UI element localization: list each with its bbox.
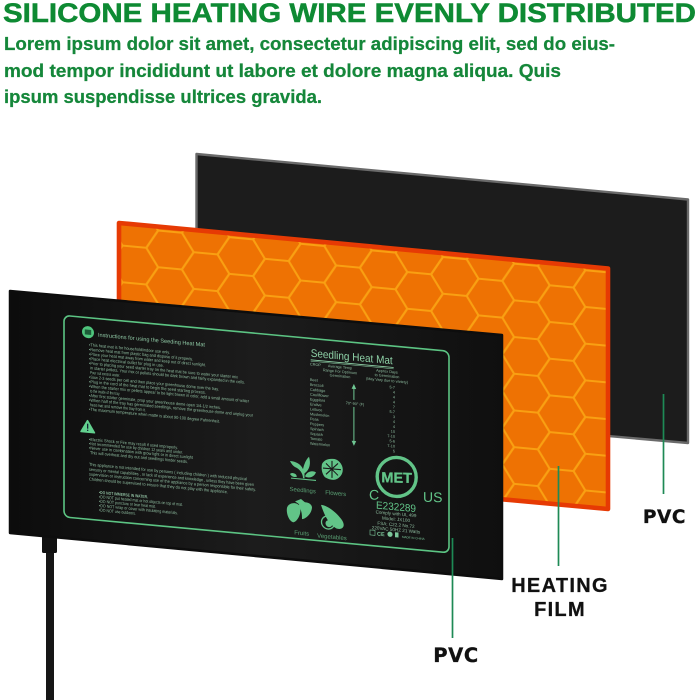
rating details: FSA: C22.2 No.72 (377, 521, 415, 529)
crop names: Beet (310, 378, 319, 383)
do not list: •DO NOT put heated mat or hot objects on top of mat. (99, 494, 183, 507)
instructions list: to the inside of the tray. (90, 388, 120, 396)
crop names: Peppers (310, 422, 324, 427)
instructions list: •Sow 2-3 seeds per cell and then place your greenhouse dome over the tray. (89, 374, 219, 392)
intro paragraph (4, 33, 615, 107)
MET certification mark: C (369, 486, 379, 503)
table header: Germination (330, 373, 350, 379)
instructions list: •Remove heat mat from plastic bag and dispose of it properly. (89, 347, 193, 362)
compliance marks (370, 530, 425, 542)
germination days: 4 (393, 395, 395, 400)
instructions list: in starter pellets. Your mix or pellets should be dark brown and fairly expanded in the cells. (90, 365, 245, 385)
MET certification mark: MET (381, 470, 412, 487)
instructions list: •The maximum temperature when matte is about 90-100 degree Fahrenheit. (89, 407, 220, 424)
crop names: Tomato (310, 437, 322, 442)
table header: to Germination (375, 373, 399, 379)
safety paragraph: Children should be supervised to ensure that they do not play with the appliance. (89, 476, 228, 494)
germination days: 5 (393, 449, 395, 454)
germination days: 4 (393, 400, 395, 405)
safety paragraph: supervision or instruction concerning use of the appliance by a person responsible for their safety. (89, 471, 256, 492)
rating details (372, 509, 421, 535)
germination days: 4 (393, 391, 395, 395)
power cable (42, 536, 57, 700)
rating details: Comply with UL 499 (376, 509, 417, 518)
icon: flowers (322, 458, 343, 481)
crop names: Squash (310, 432, 323, 437)
intro paragraph: mod tempor incididunt ut labore et dolore magna aliqua. Quis (4, 60, 561, 81)
intro paragraph: ipsum suspendisse ultrices gravida. (4, 86, 322, 107)
warnings list: •Not recommended for use by children 12 years and under. (89, 441, 183, 455)
instructions list (89, 342, 254, 427)
green printed border (64, 315, 449, 553)
do not list: •DO NOT wrap or cover with insulating materials. (99, 503, 178, 515)
crop names: Muskmelon (310, 412, 329, 418)
label: back PVC: PVC (643, 507, 686, 528)
crop names: Cabbage (310, 388, 325, 393)
warnings list: •Never use in combination with grow light or in direct sunlight (89, 445, 194, 460)
crop names: Peas (310, 417, 319, 422)
arrow: front PVC leader (452, 538, 454, 638)
table header: Range For Optimum (323, 368, 357, 375)
warnings list (89, 437, 194, 465)
label: heating film (511, 575, 609, 621)
seedlings label: Seedlings (290, 487, 316, 495)
do not list: •DO NOT IMMERSE IN WATER. (99, 490, 148, 499)
table header: CROP (310, 362, 321, 367)
germination days: 5-7 (390, 385, 395, 390)
table header: Average Temp (328, 364, 352, 370)
safety paragraph: sensory or mental capabilities , or lack of experience and knowledge , unless they have been given (89, 467, 255, 487)
instructions list: heat mat and remove the tray from it. (90, 402, 146, 412)
MET certification mark (369, 457, 442, 505)
front PVC mat (10, 291, 502, 579)
germination days: 10 (391, 430, 395, 434)
do not list (99, 490, 183, 520)
icon: fruits (287, 498, 312, 524)
table header: (May Vary due to variety) (366, 377, 409, 385)
fruits label: Fruits (294, 530, 309, 538)
crop names: Lettuce (310, 407, 322, 412)
instructions list: •Prior to placing your seed starter tray on the heat mat be sure to water your starter mix (89, 361, 239, 380)
label: heating film: FILM (534, 599, 586, 621)
certification number: E232289 (376, 499, 416, 515)
instructions list: •This heat mat is for household/indoor use only. (89, 342, 170, 355)
instructions list: •When the starter mix or pellets appear to be light brown in color, add a small amount of water (89, 384, 250, 404)
safety paragraph: This appliance is not intended for use by persons ( including children ) with reduced physical (89, 462, 247, 481)
germination days: 5-7 (390, 410, 395, 414)
instructions heading: Instructions for using the Seeding Heat Mat (98, 333, 205, 349)
do not list: •DO NOT use outdoors. (99, 507, 136, 516)
instructions list: •Plug in the cord of the heat mat to begin the seed starting process. (89, 379, 206, 395)
warnings list: This will overheat and dry out and seedlings hinder seeds. (90, 450, 188, 464)
table header: Approx Days (376, 369, 398, 375)
vegetables label: Vegetables (317, 534, 347, 542)
crop names: Spinach (310, 427, 324, 432)
rating details: Model: JX100 (382, 516, 410, 523)
germination days: 5-6 (390, 439, 395, 444)
label: front PVC: PVC (433, 644, 479, 667)
intro paragraph: Lorem ipsum dolor sit amet, consectetur adipiscing elit, sed do eius- (4, 33, 615, 54)
crop names: Watermelon (310, 442, 330, 448)
table header (310, 362, 409, 385)
germination days: 7 (393, 405, 395, 409)
crop names: Eggplant (310, 398, 326, 403)
icon: instruction book (82, 326, 94, 339)
safety paragraph (89, 462, 256, 497)
instructions list: •Place heat electrical outlet for plug in use. (89, 356, 164, 368)
germination days: 7-10 (387, 444, 395, 449)
instructions list: •Place your heat mat away from water and keep out of direct sunlight. (89, 351, 206, 367)
instructions list: •When half of the tray has germinated seedlings, remove the greenhouse dome and unplug your (89, 397, 254, 418)
temperature range arrow (346, 383, 365, 447)
label: heating film: HEATING (511, 575, 609, 597)
icon: seedlings (290, 455, 316, 481)
germination days: 7-10 (387, 434, 395, 439)
crop names: Cauliflower (310, 393, 329, 398)
compliance marks: MADE IN CHINA (402, 535, 425, 541)
back PVC layer (196, 154, 688, 443)
arrow: heating film leader (558, 466, 560, 566)
crop names: Broccoli (310, 383, 324, 388)
instructions list: Pour out excess water. (90, 370, 120, 378)
crop names (310, 378, 330, 448)
product name: Seedling Heat Mat (311, 348, 393, 367)
germination days: 3 (393, 415, 395, 419)
icon: warning triangle (81, 420, 94, 433)
germination days (387, 385, 395, 454)
warnings list: •Electric Shock or Fire may result if used improperly. (89, 437, 178, 450)
heating film layer (119, 223, 608, 509)
do not list: •DO NOT puncture or tear heat mat. (99, 499, 156, 509)
MET certification mark: US (423, 489, 442, 505)
rating details: 220VAC 50HZ 21 Watts (372, 525, 421, 535)
germination days: 4 (393, 425, 395, 429)
icon: vegetables (321, 505, 344, 530)
compliance marks: CE (377, 532, 385, 538)
flowers label: Flowers (325, 490, 346, 498)
arrow: back PVC leader (662, 394, 664, 494)
mat body (10, 291, 502, 579)
instructions list: •After first starter germinate, prop your greenhouse dome open 1/4-1/2 inches. (89, 393, 221, 410)
printed instructions area (skewed to mat perspective) (64, 315, 449, 553)
temperature range arrow: 70°-90° (F) (346, 401, 365, 407)
crop names: Endive (310, 402, 322, 408)
germination days: 4 (393, 420, 395, 424)
